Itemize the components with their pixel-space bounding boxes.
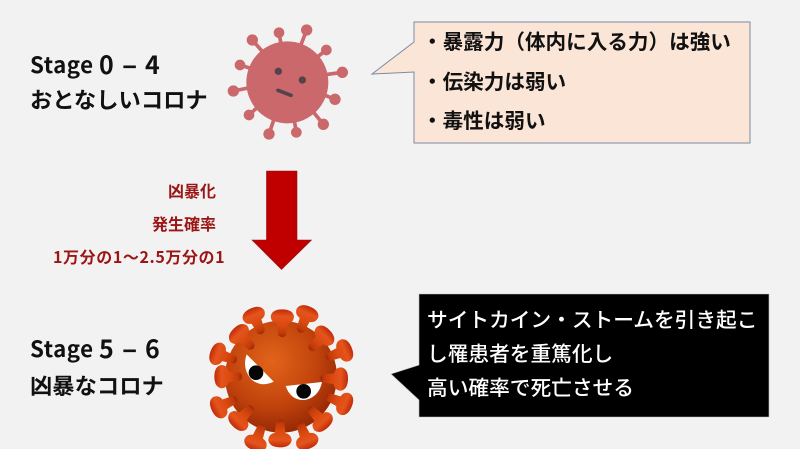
text: escalation label: 凶暴化 [168,178,216,202]
heading: fierce coronavirus: 凶暴なコロナ [30,369,164,401]
callout: cytokine storm background [391,294,769,417]
text: calm virus properties: ・伝染力は弱い [422,65,566,95]
text: probability label: 発生確率 [152,211,216,235]
text: cytokine storm description: サイトカイン・ストームを引き起こ [427,303,757,333]
heading: stage 0-4: 4 [145,46,160,82]
text: probability value: 1万分の1～2.5万分の1 [53,244,225,268]
text: cytokine storm description: 高い確率で死亡させる [427,371,634,401]
text: cytokine storm description [427,303,757,401]
text: calm virus properties: ・毒性は弱い [422,104,546,134]
heading: stage 0-4: Stage [30,48,94,80]
arrow: downward escalation [252,171,312,270]
icon: angry coronavirus [207,302,356,449]
heading: stage 5-6: 5 [99,330,114,366]
heading: stage 0-4: 0 [99,46,114,82]
heading: stage 0-4 [30,44,160,84]
callout: calm virus properties background [372,22,750,143]
heading: stage 0-4: – [122,44,137,84]
heading: stage 5-6 [30,328,160,368]
heading: stage 5-6: 6 [145,330,160,366]
text: cytokine storm description: し罹患者を重篤化し [427,337,613,367]
text: calm virus properties [422,25,731,134]
icon: calm coronavirus [228,24,348,140]
heading: stage 5-6: Stage [30,332,94,364]
text: calm virus properties: ・暴露力（体内に入る力）は強い [422,25,731,55]
heading: calm coronavirus: おとなしいコロナ [30,83,208,115]
heading: stage 5-6: – [122,328,137,368]
